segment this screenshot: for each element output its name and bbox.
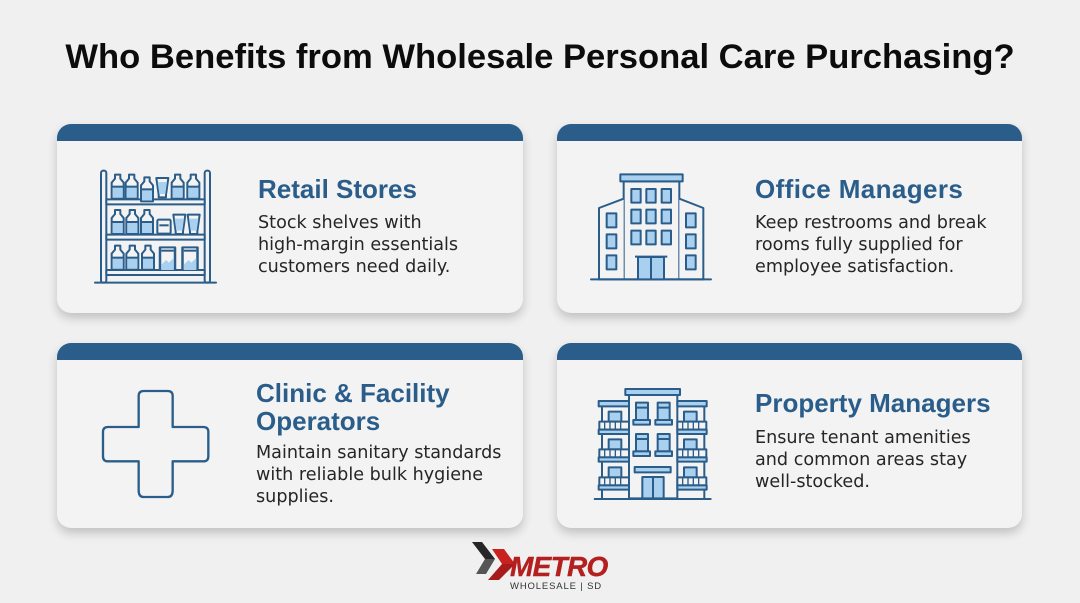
heading: clinic and facility operators	[256, 378, 450, 436]
panel: office managers	[557, 124, 1022, 313]
icon: apartment building	[594, 388, 712, 500]
text: property managers: Ensure tenant amenities	[755, 428, 971, 448]
text: office managers: rooms fully supplied for	[755, 235, 963, 255]
text: office managers: Keep restrooms and break	[755, 213, 987, 233]
heading: retail stores: Retail Stores	[258, 174, 417, 204]
logo: Metro Wholesale SD: WHOLESALE | SD	[510, 581, 602, 592]
panel: retail stores	[57, 124, 523, 313]
heading: property managers: Property Managers	[755, 388, 991, 418]
text: retail stores: customers need daily.	[258, 257, 450, 277]
logo: Metro Wholesale SD: METRO	[510, 551, 608, 582]
panel: clinic and facility operators	[57, 343, 523, 528]
text: property managers	[755, 428, 971, 492]
title: Who Benefits from Wholesale Personal Care Purchasing?	[65, 38, 1015, 76]
text: clinic and facility operators: supplies.	[256, 487, 334, 507]
text: office managers	[755, 213, 987, 277]
icon: retail shelf	[94, 170, 218, 284]
text: clinic and facility operators	[256, 443, 501, 507]
heading: office managers: Office Managers	[755, 174, 963, 204]
text: retail stores	[258, 213, 458, 277]
text: retail stores: high-margin essentials	[258, 235, 458, 255]
text: property managers: well-stocked.	[755, 472, 870, 492]
text: retail stores: Stock shelves with	[258, 213, 422, 233]
text: property managers: and common areas stay	[755, 450, 967, 470]
heading: clinic and facility operators: Operators	[256, 406, 380, 436]
heading: clinic and facility operators: Clinic & Facility	[256, 378, 450, 408]
text: office managers: employee satisfaction.	[755, 257, 954, 277]
panel: property managers	[557, 343, 1022, 528]
logo: Metro Wholesale SD	[472, 542, 608, 592]
icon: office building	[590, 173, 712, 280]
text: clinic and facility operators: with reliable bulk hygiene	[256, 465, 483, 485]
text: clinic and facility operators: Maintain sanitary standards	[256, 443, 501, 463]
icon: medical cross	[102, 390, 210, 498]
